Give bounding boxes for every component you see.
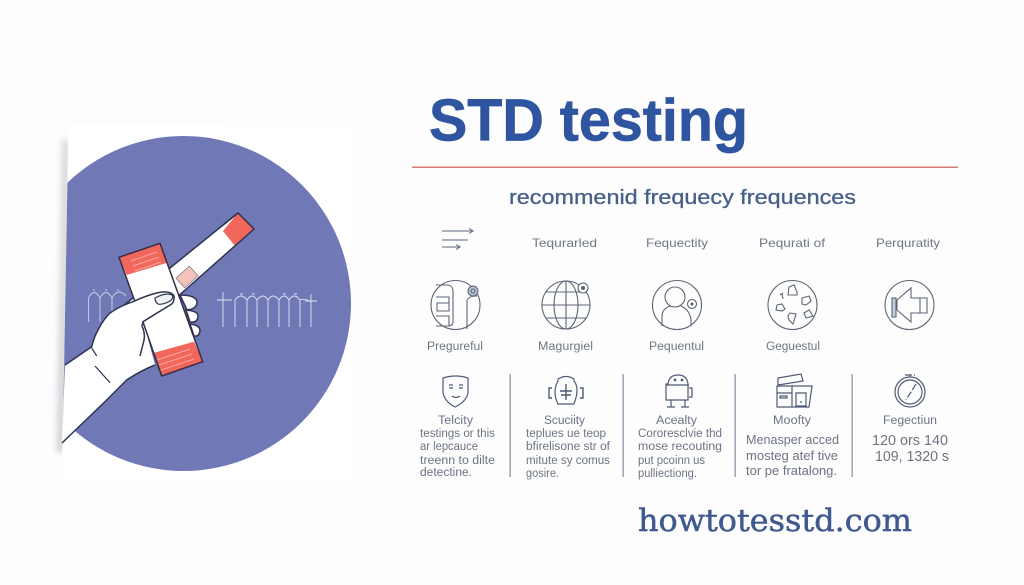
website url: howtotesstd.com <box>638 503 912 539</box>
column: Acealty: Acealty <box>656 415 697 427</box>
icon: person <box>652 280 702 330</box>
illustration: test strip <box>118 213 254 330</box>
column: Acealty: pulliectiong. <box>638 468 697 480</box>
header: Fequectity: Fequectity <box>646 236 708 250</box>
bottom icons <box>443 374 925 407</box>
icon: scattered shapes <box>768 280 817 330</box>
column: Acealty <box>638 415 722 480</box>
column: Moofty <box>746 415 839 478</box>
illustration: purple circle <box>63 136 351 471</box>
icon: shield badge <box>549 376 583 404</box>
divider: title rule <box>412 166 958 168</box>
column: Moofty: mosteg atef tive <box>746 448 838 463</box>
column: Scuciity: teplues ue teop <box>526 428 606 440</box>
column: Scuciity: Scuciity <box>544 415 585 427</box>
column: Moofty: Menasper acced <box>746 432 839 447</box>
column: Telcity: treenn to dilte <box>420 455 495 467</box>
column: Scuciity <box>526 415 611 480</box>
subtitle: recommenid frequecy frequences <box>509 187 856 209</box>
panel: illustration card <box>54 136 351 471</box>
column: Fegectiun: 120 ors 140 <box>872 433 948 449</box>
column: Scuciity: gosire. <box>526 468 559 480</box>
icon row <box>431 280 934 330</box>
icon: robot <box>666 375 692 407</box>
label: Pequentul: Pequentul <box>649 341 704 353</box>
icon: globe <box>542 281 590 329</box>
column: Telcity <box>420 415 495 479</box>
label: Pregureful: Pregureful <box>427 341 483 353</box>
bottom column dividers <box>510 374 853 477</box>
column: Acealty: Cororesclvie thd <box>638 428 722 440</box>
header: Perquratity: Perquratity <box>876 236 940 250</box>
title: STD testing <box>429 88 748 154</box>
illustration: hand holding the test <box>62 292 174 443</box>
icon: boxes <box>777 374 812 407</box>
column: Acealty: mose recouting <box>638 441 722 453</box>
icon: arrow <box>885 280 934 330</box>
illustration: back fingers <box>180 295 200 336</box>
column: Fegectiun: 109, 1320 s <box>875 449 949 465</box>
illustration: test box <box>119 243 203 376</box>
icon: mask face <box>443 376 468 407</box>
column: Fegectiun: Fegectiun <box>883 415 937 427</box>
icon: stopwatch <box>895 375 925 407</box>
icon: header arrows <box>442 228 473 250</box>
column: Telcity: ar lepcauce <box>420 441 478 453</box>
illustration: thumbnail and wrist creases <box>92 294 173 383</box>
column: Scuciity: mitute sy comus <box>526 455 610 467</box>
label: Magurgiel: Magurgiel <box>538 341 593 353</box>
table header row <box>442 228 940 250</box>
row of icon labels <box>427 341 820 353</box>
column: Fegectiun <box>872 415 949 465</box>
column: Scuciity: bfirelisone str of <box>526 441 611 453</box>
header: Tequrarled: Tequrarled <box>532 236 597 250</box>
column: Acealty: put pcoinn us <box>638 455 705 467</box>
column: Moofty: Moofty <box>773 415 811 427</box>
column: Telcity: detectine. <box>420 467 472 479</box>
ornament: right white line pattern <box>217 292 317 327</box>
column: Telcity: Telcity <box>438 415 473 427</box>
column: Telcity: testings or this <box>420 428 495 440</box>
ornament: left white line pattern <box>88 290 126 322</box>
column: Moofty: tor pe fratalong. <box>746 463 837 478</box>
header: Pequrati of: Pequrati of <box>759 236 826 250</box>
label: Geguestul: Geguestul <box>766 341 820 353</box>
icon: document circle <box>431 280 480 330</box>
